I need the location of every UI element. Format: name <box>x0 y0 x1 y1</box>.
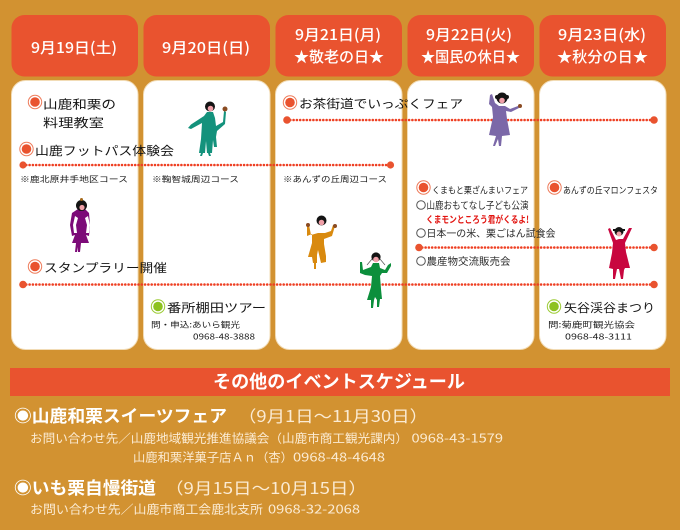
figure: green person with long hair <box>360 252 391 308</box>
markers: event bullets <box>20 95 561 313</box>
header: September 22: 9月22日(火) <box>426 24 512 45</box>
list: Kumamoto chestnut fair programme: 日本一の米、栗ごはん試食会 <box>426 225 556 240</box>
header: September 23: 9月23日(水) <box>558 24 646 45</box>
panel: day columns <box>12 80 666 350</box>
event block: Yamaga sweets fair: （9月1日〜11月30日） <box>238 403 428 427</box>
figure: crimson woman with arms up <box>608 227 632 279</box>
header: September 21: 9月21日(月) <box>295 24 381 45</box>
event labels: 問:菊鹿町観光協会 <box>548 320 635 330</box>
event period lines <box>19 116 658 288</box>
heading band: other events <box>10 368 670 396</box>
list: Kumamoto chestnut fair programme: 山鹿おもてなし子ども公演 <box>426 197 528 212</box>
figure: orange person with raised hands <box>306 216 337 269</box>
panel: date headers <box>12 15 666 76</box>
event labels: ※鹿北原井手地区コース <box>20 174 128 185</box>
event block: Imo-kuri kaido: （9月15日〜10月15日） <box>165 475 367 499</box>
event labels: 山鹿フットパス体験会 <box>35 142 174 159</box>
figure: purple woman in dress <box>70 198 90 252</box>
header: September 21 <box>276 15 402 76</box>
event labels: 番所棚田ツアー <box>167 299 266 316</box>
figure: teal person holding chestnut <box>188 102 228 156</box>
heading band: other events: その他のイベントスケジュール <box>213 368 465 394</box>
event block: Yamaga sweets fair: 0968-48-4648 <box>293 448 385 466</box>
figure: lilac woman waving <box>489 92 522 146</box>
event labels: ※あんずの丘周辺コース <box>283 174 387 185</box>
event labels: 山鹿和栗の <box>43 96 116 112</box>
event labels: くまもと栗ざんまいフェア <box>432 184 528 196</box>
header: September 22: ★国民の休日★ <box>421 46 520 67</box>
event labels: 問・申込:あいら観光 <box>151 320 240 330</box>
event block: Yamaga sweets fair: 山鹿和栗洋菓子店Ａｎ（杏） <box>133 448 293 466</box>
event block: Yamaga sweets fair: 0968-43-1579 <box>412 430 503 446</box>
event labels <box>20 95 658 342</box>
header: September 21: ★敬老の日★ <box>294 46 384 67</box>
header: September 19: 9月19日(土) <box>31 37 117 58</box>
event labels: 料理教室 <box>43 114 104 131</box>
list: Kumamoto chestnut fair programme <box>417 197 556 268</box>
event block: Yamaga sweets fair: ◉山鹿和栗スイーツフェア <box>14 402 227 427</box>
event labels: 0968-48-3888 <box>193 332 256 342</box>
list: Kumamoto chestnut fair programme: くまモンところう君がくるよ! <box>426 212 529 226</box>
event labels: あんずの丘マロンフェスタ <box>563 184 658 196</box>
event block: Imo-kuri kaido: ◉いも栗自慢街道 <box>14 474 156 499</box>
event block: Imo-kuri kaido: お問い合わせ先／山鹿市商工会鹿北支所 <box>30 500 263 518</box>
header: September 23: ★秋分の日★ <box>557 46 648 67</box>
event block: Yamaga sweets fair: お問い合わせ先／山鹿地域観光推進協議会（山鹿市商工観光課内） <box>30 430 408 446</box>
event block: Imo-kuri kaido <box>14 474 367 518</box>
event labels: お茶街道でいっぷくフェア <box>299 95 463 112</box>
event labels: スタンプラリー開催 <box>44 259 167 276</box>
event labels: ※鞠智城周辺コース <box>152 174 239 185</box>
header: September 23 <box>540 15 666 76</box>
event block: Yamaga sweets fair <box>14 402 503 466</box>
header: September 20 <box>144 15 270 76</box>
event block: Imo-kuri kaido: 0968-32-2068 <box>268 500 360 518</box>
event labels: 矢谷渓谷まつり <box>564 299 655 316</box>
event labels: 0968-48-3111 <box>565 332 632 342</box>
header: September 19 <box>12 15 138 76</box>
header: September 20: 9月20日(日) <box>162 37 250 58</box>
header: September 22 <box>408 15 534 76</box>
list: Kumamoto chestnut fair programme: 農産物交流販売会 <box>426 253 510 268</box>
